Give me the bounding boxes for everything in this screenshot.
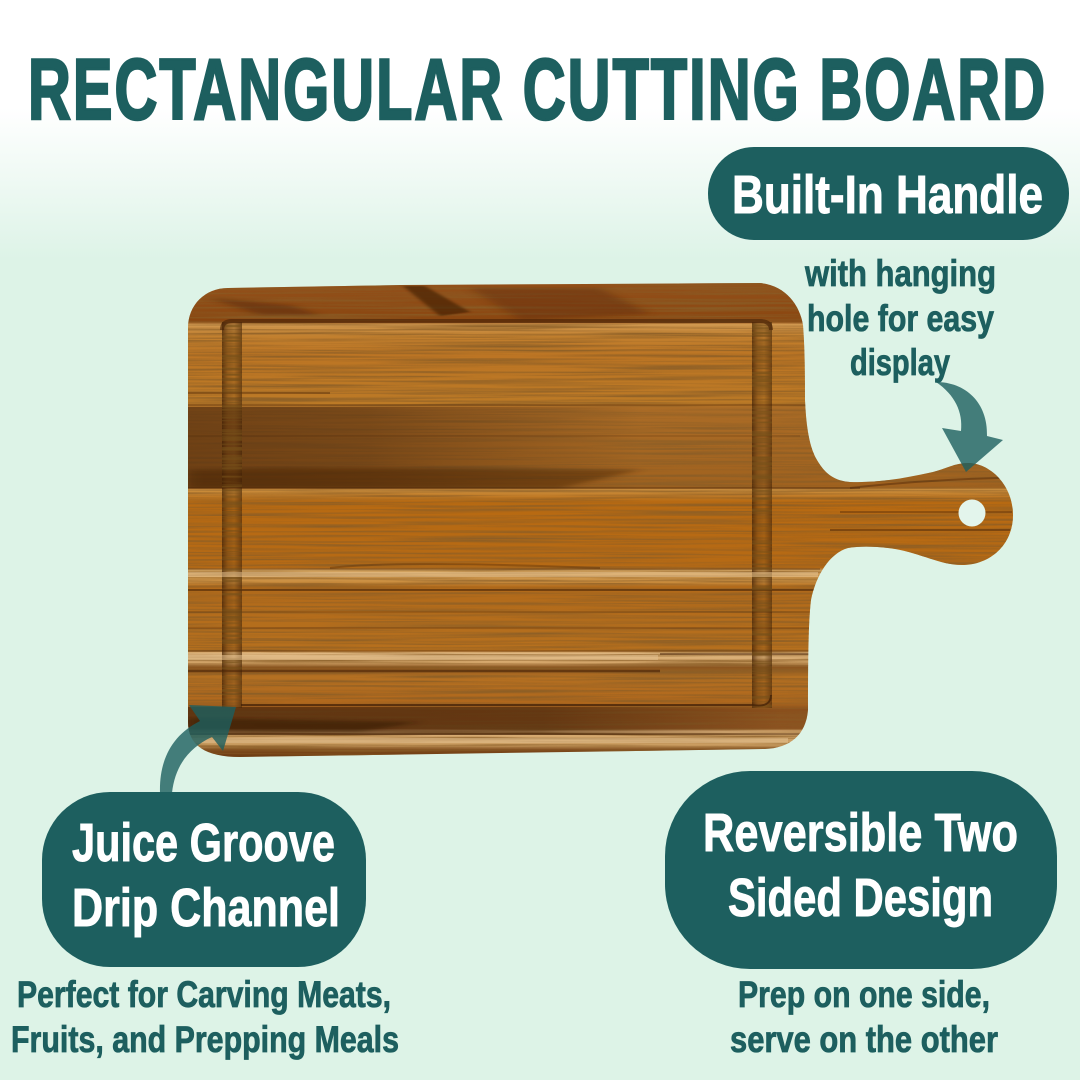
pill: built-in handle <box>708 147 1069 240</box>
text: handle description: hole for easy <box>807 298 994 339</box>
text: handle description: with hanging <box>804 253 996 294</box>
text: juice groove description: Fruits, and Prepping Meals <box>11 1019 399 1060</box>
pill: reversible design <box>665 771 1057 969</box>
wood grain lines <box>188 393 1012 734</box>
text: reversible description: Prep on one side, <box>738 974 990 1015</box>
title: RECTANGULAR CUTTING BOARD <box>28 41 1045 138</box>
pill: juice groove <box>42 792 366 967</box>
text: reversible description: serve on the other <box>730 1019 998 1060</box>
hanging hole <box>958 500 986 526</box>
text: reversible description <box>730 974 998 1060</box>
text: handle description: display <box>850 342 950 383</box>
highlight streaks <box>188 572 818 743</box>
juice groove <box>222 321 772 708</box>
text: juice groove description <box>11 974 399 1060</box>
text: juice groove description: Perfect for Carving Meats, <box>17 974 391 1015</box>
arrow: to juice groove <box>160 705 236 793</box>
pill: juice groove: Juice Groove <box>72 813 335 873</box>
cutting board illustration <box>180 280 1020 760</box>
pill: reversible design: Sided Design <box>728 868 993 928</box>
arrow: to handle hole <box>936 382 1003 472</box>
pill: juice groove: Drip Channel <box>72 878 340 938</box>
text: handle description <box>804 253 996 383</box>
dark wood patches <box>188 286 788 735</box>
